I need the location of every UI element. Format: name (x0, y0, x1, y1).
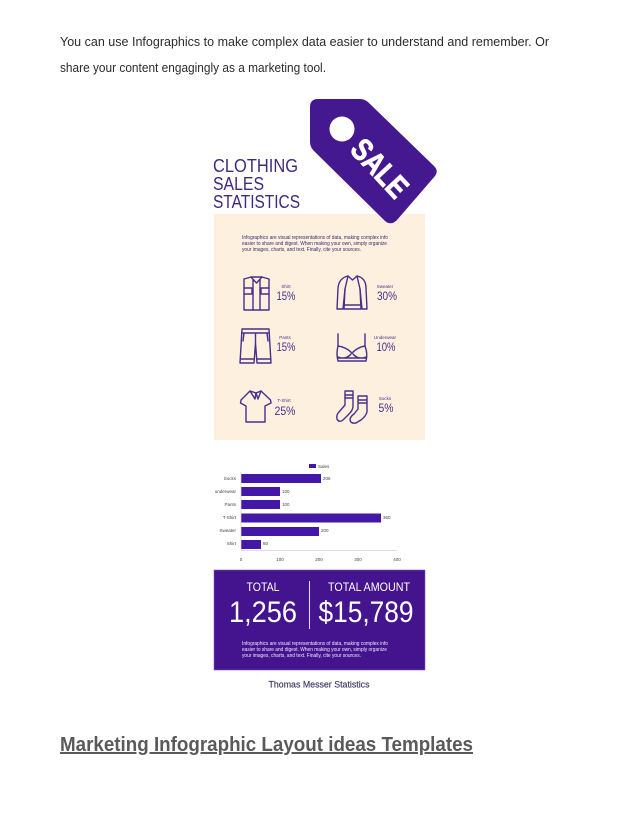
intro paragraph: share your content engagingly as a marketing tool. (60, 60, 326, 75)
value labels (263, 476, 391, 546)
category labels: Sweater (219, 528, 236, 533)
intro paragraph (60, 34, 550, 75)
label: socks 5%: Socks (379, 396, 392, 401)
value labels: 50 (263, 541, 269, 546)
label: sweater 30%: 30% (377, 291, 397, 303)
icon: pants (240, 329, 271, 363)
label: t-shirt 25%: T-Shirt (277, 398, 291, 403)
label: underwear 10% (374, 335, 397, 354)
title: STATISTICS (213, 192, 300, 212)
divider (308, 581, 310, 629)
label: socks 5% (378, 396, 394, 415)
total number: 1,256 (229, 596, 297, 629)
axis tick labels: 400 (393, 557, 401, 562)
intro text block in cream panel: easier to share and digest. When making your own, simply organize (242, 241, 387, 247)
chart axes (241, 472, 397, 550)
label: socks 5%: 5% (378, 403, 394, 415)
label: pants 15%: 15% (276, 342, 296, 354)
total label: TOTAL (246, 582, 280, 594)
title (213, 156, 300, 212)
icon: shirt (244, 277, 269, 310)
label: pants 15% (276, 335, 296, 354)
label: shirt 15%: Shirt (281, 284, 291, 289)
icon: sweater (337, 276, 367, 309)
chart legend (309, 464, 330, 469)
intro text block in cream panel: your images, charts, and text. Finally, cite your sources. (242, 247, 361, 253)
title: SALES (213, 174, 264, 194)
label: t-shirt 25%: 25% (274, 406, 296, 418)
icon: t-shirt (240, 391, 271, 422)
intro text block in cream panel: Infographics are visual representations of data, making complex info (242, 235, 388, 241)
icon: sale tag (310, 99, 437, 223)
attribution: Thomas Messer Statistics (268, 680, 370, 690)
total amount number: $15,789 (318, 596, 414, 629)
panel text block (242, 641, 388, 659)
label: shirt 15%: 15% (276, 291, 296, 303)
label: underwear 10%: Underwear (374, 335, 397, 340)
value labels: 100 (282, 489, 290, 494)
label: underwear 10%: 10% (376, 342, 396, 354)
icon: sale tag: SALE (344, 132, 416, 205)
axis tick labels: 100 (276, 557, 284, 562)
value labels: 100 (282, 502, 290, 507)
category labels: T-Shirt (223, 515, 237, 520)
icon: underwear (337, 334, 367, 361)
title: CLOTHING (213, 156, 298, 176)
chart bars (241, 474, 381, 549)
label: shirt 15% (276, 284, 296, 303)
category labels: Pants (224, 502, 237, 507)
value labels: 200 (321, 528, 329, 533)
label: sweater 30%: Sweater (377, 284, 394, 289)
axis tick labels: 200 (315, 557, 323, 562)
category labels: underwear (215, 489, 236, 494)
icon: socks (337, 391, 367, 423)
category labels (215, 476, 237, 546)
label: sweater 30% (377, 284, 397, 303)
label: t-shirt 25% (274, 398, 296, 418)
axis tick labels: 300 (354, 557, 362, 562)
intro text block in cream panel (242, 235, 388, 253)
chart legend: Sales (318, 464, 330, 469)
label: pants 15%: Pants (279, 335, 291, 340)
panel text block: your images, charts, and text. Finally, cite your sources. (242, 653, 361, 659)
panel: cream statistics background (214, 214, 425, 440)
section heading: Marketing Infographic Layout ideas Templates (60, 734, 473, 756)
axis tick labels (240, 557, 401, 562)
intro paragraph: You can use Infographics to make complex data easier to understand and remember. Or (60, 34, 550, 49)
bar chart: sales (215, 464, 401, 562)
panel text block: Infographics are visual representations of data, making complex info (242, 641, 388, 647)
category labels: Socks (224, 476, 237, 481)
category labels: Shirt (227, 541, 237, 546)
value labels: 360 (383, 515, 391, 520)
panel: totals (214, 570, 425, 670)
total amount label: TOTAL AMOUNT (328, 582, 410, 594)
axis tick labels: 0 (240, 557, 243, 562)
value labels: 206 (323, 476, 331, 481)
panel text block: easier to share and digest. When making your own, simply organize (242, 647, 387, 653)
